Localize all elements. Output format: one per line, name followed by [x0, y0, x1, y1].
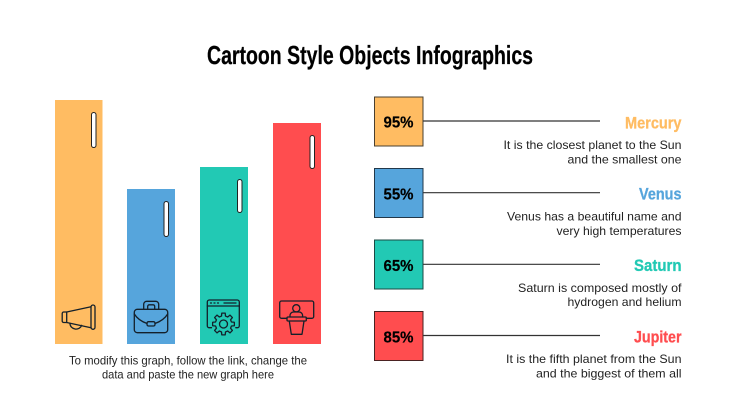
- description: hydrogen and helium: [568, 295, 682, 309]
- description: [507, 210, 682, 238]
- value box 95%: [374, 97, 423, 146]
- item: Jupiter: [374, 312, 682, 381]
- bar chart: [55, 100, 321, 382]
- heading: Venus: [639, 184, 682, 204]
- icon: briefcase: [134, 301, 168, 333]
- value box 55%: 55%: [384, 186, 414, 204]
- bar: orange: [55, 100, 102, 344]
- description: Venus has a beautiful name and: [507, 210, 682, 224]
- item: Venus: [374, 168, 682, 238]
- description: and the biggest of them all: [536, 367, 682, 381]
- value box 65%: [374, 240, 423, 289]
- heading: Saturn: [634, 256, 682, 275]
- heading: Jupiter: [634, 328, 682, 347]
- description: [506, 352, 682, 381]
- description: It is the fifth planet from the Sun: [506, 352, 682, 366]
- description: It is the closest planet to the Sun: [504, 138, 682, 152]
- icon: speaker at podium: [280, 301, 314, 334]
- chart caption: To modify this graph, follow the link, change the: [69, 354, 307, 368]
- value box 65%: 65%: [384, 258, 414, 275]
- bar: blue: [127, 189, 175, 344]
- description: and the smallest one: [568, 152, 682, 166]
- bar: red: [273, 123, 321, 344]
- value box 55%: [374, 168, 423, 218]
- heading: Mercury: [625, 113, 682, 132]
- value box 85%: [374, 312, 423, 360]
- description: Saturn is composed mostly of: [518, 281, 682, 295]
- description: [518, 281, 682, 309]
- icon: megaphone: [62, 305, 95, 329]
- item: Mercury: [374, 97, 682, 166]
- chart caption: [69, 354, 307, 382]
- item: Saturn: [374, 240, 682, 309]
- description: [504, 138, 682, 166]
- value box 95%: 95%: [384, 114, 414, 132]
- icon: gear window: [207, 300, 239, 335]
- title: Cartoon Style Objects Infographics: [207, 40, 533, 70]
- bar: green: [200, 167, 248, 344]
- description: very high temperatures: [556, 224, 682, 238]
- value box 85%: 85%: [384, 330, 414, 346]
- chart caption: data and paste the new graph here: [102, 368, 274, 382]
